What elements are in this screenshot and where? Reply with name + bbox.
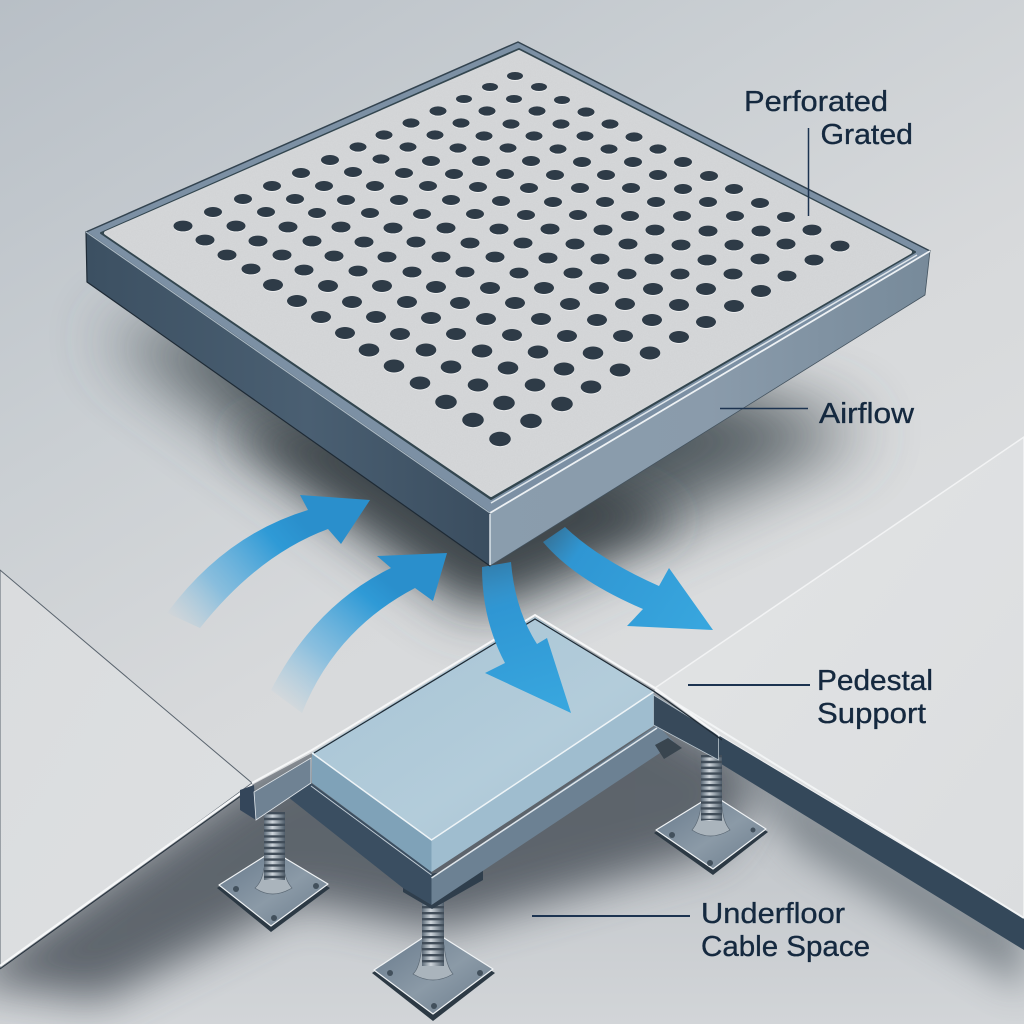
- label: Perforated Grated with leader: [744, 86, 913, 216]
- tile edge highlights around cell: [252, 615, 722, 783]
- airflow arrow: right: [543, 527, 713, 630]
- perforation holes: [174, 72, 850, 446]
- label: Pedestal Support with leader: [688, 665, 933, 730]
- panel frame rim: [86, 42, 930, 513]
- panel side: right: [490, 251, 930, 566]
- insulation slab in open floor cell: [312, 617, 654, 872]
- label: Underfloor Cable Space with leader: Underfloor: [701, 898, 845, 930]
- airflow arrow: lower left: [271, 553, 447, 713]
- floor tile: left: [0, 570, 252, 968]
- label: Underfloor Cable Space with leader: Cable Space: [701, 931, 870, 963]
- airflow arrow: upper left: [167, 495, 370, 628]
- pedestal head: right: [654, 695, 719, 760]
- airflow arrow: down to slab: [482, 562, 571, 713]
- perforated floor panel: [86, 42, 930, 566]
- panel side: left: [86, 232, 490, 566]
- label: Airflow with leader: Airflow: [819, 398, 915, 430]
- shadow cast by floating panel: [100, 320, 870, 610]
- label: Underfloor Cable Space with leader: [532, 898, 870, 963]
- underfloor cavity: [0, 617, 1024, 1024]
- pedestal: rear right: [654, 755, 768, 875]
- pedestal head: left: [240, 758, 311, 820]
- label: Perforated Grated with leader: Grated: [820, 119, 913, 151]
- pedestal: front: [372, 900, 495, 1021]
- label: Pedestal Support with leader: Support: [817, 698, 926, 730]
- left tile front lip: [0, 785, 252, 969]
- label: Perforated Grated with leader: Perforated: [744, 86, 888, 118]
- right tile dark edge: [655, 690, 1024, 950]
- pedestal: rear left: [217, 812, 330, 932]
- support frame under insulation slab: [288, 725, 682, 909]
- floor tile: right: [655, 437, 1024, 918]
- label: Pedestal Support with leader: Pedestal: [817, 665, 933, 697]
- panel perforated surface: [106, 52, 910, 495]
